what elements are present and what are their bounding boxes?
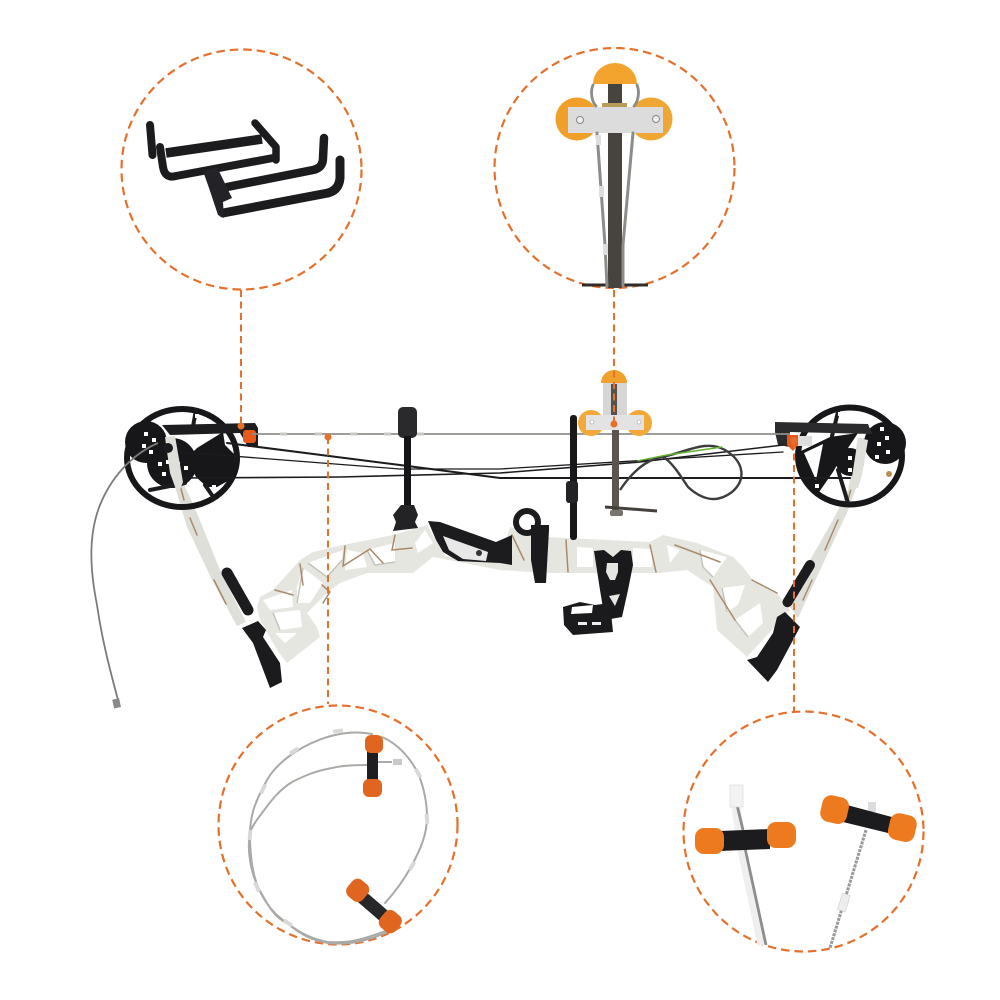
riser [257, 525, 790, 663]
stabilizer [393, 407, 418, 531]
cam mount bar [162, 423, 258, 447]
orange stop [243, 430, 256, 443]
leader line: brackets to upper-left cam [238, 290, 244, 430]
icon: left T-shaped cable end [695, 785, 796, 945]
icon: bow press with threaded rod [556, 63, 672, 288]
callout circle: limb brackets [122, 50, 362, 290]
leader line: press head to bow centre [610, 290, 618, 428]
press T rod [605, 430, 657, 516]
icon: looped steel cable with orange caps [248, 728, 429, 944]
orange stop [787, 435, 798, 451]
icon: black metal brackets [150, 123, 340, 218]
right limb section over cam [850, 438, 868, 490]
callout circle: orange-capped cable ends [684, 712, 924, 952]
icon: right T-shaped cable end [818, 793, 919, 948]
bow [91, 370, 906, 709]
leader line: cable assembly to cable [324, 434, 332, 704]
callout circle: cable assembly [218, 706, 458, 944]
left cam [125, 409, 258, 507]
callout circle: bow press head [494, 48, 734, 288]
loose cable on left [91, 443, 158, 709]
leader line: cable end to right cam [790, 438, 798, 712]
arrow rest [516, 415, 578, 583]
right cam [775, 408, 906, 504]
sight bracket [563, 550, 633, 635]
green-wrapped cable loop [620, 446, 741, 499]
limb pockets [242, 612, 800, 688]
grip [428, 521, 512, 565]
mini press head [578, 370, 652, 436]
upper limbs [166, 436, 868, 626]
cables and strings [180, 432, 850, 478]
limb dampers [227, 565, 810, 610]
left limb section over cam [163, 436, 183, 495]
